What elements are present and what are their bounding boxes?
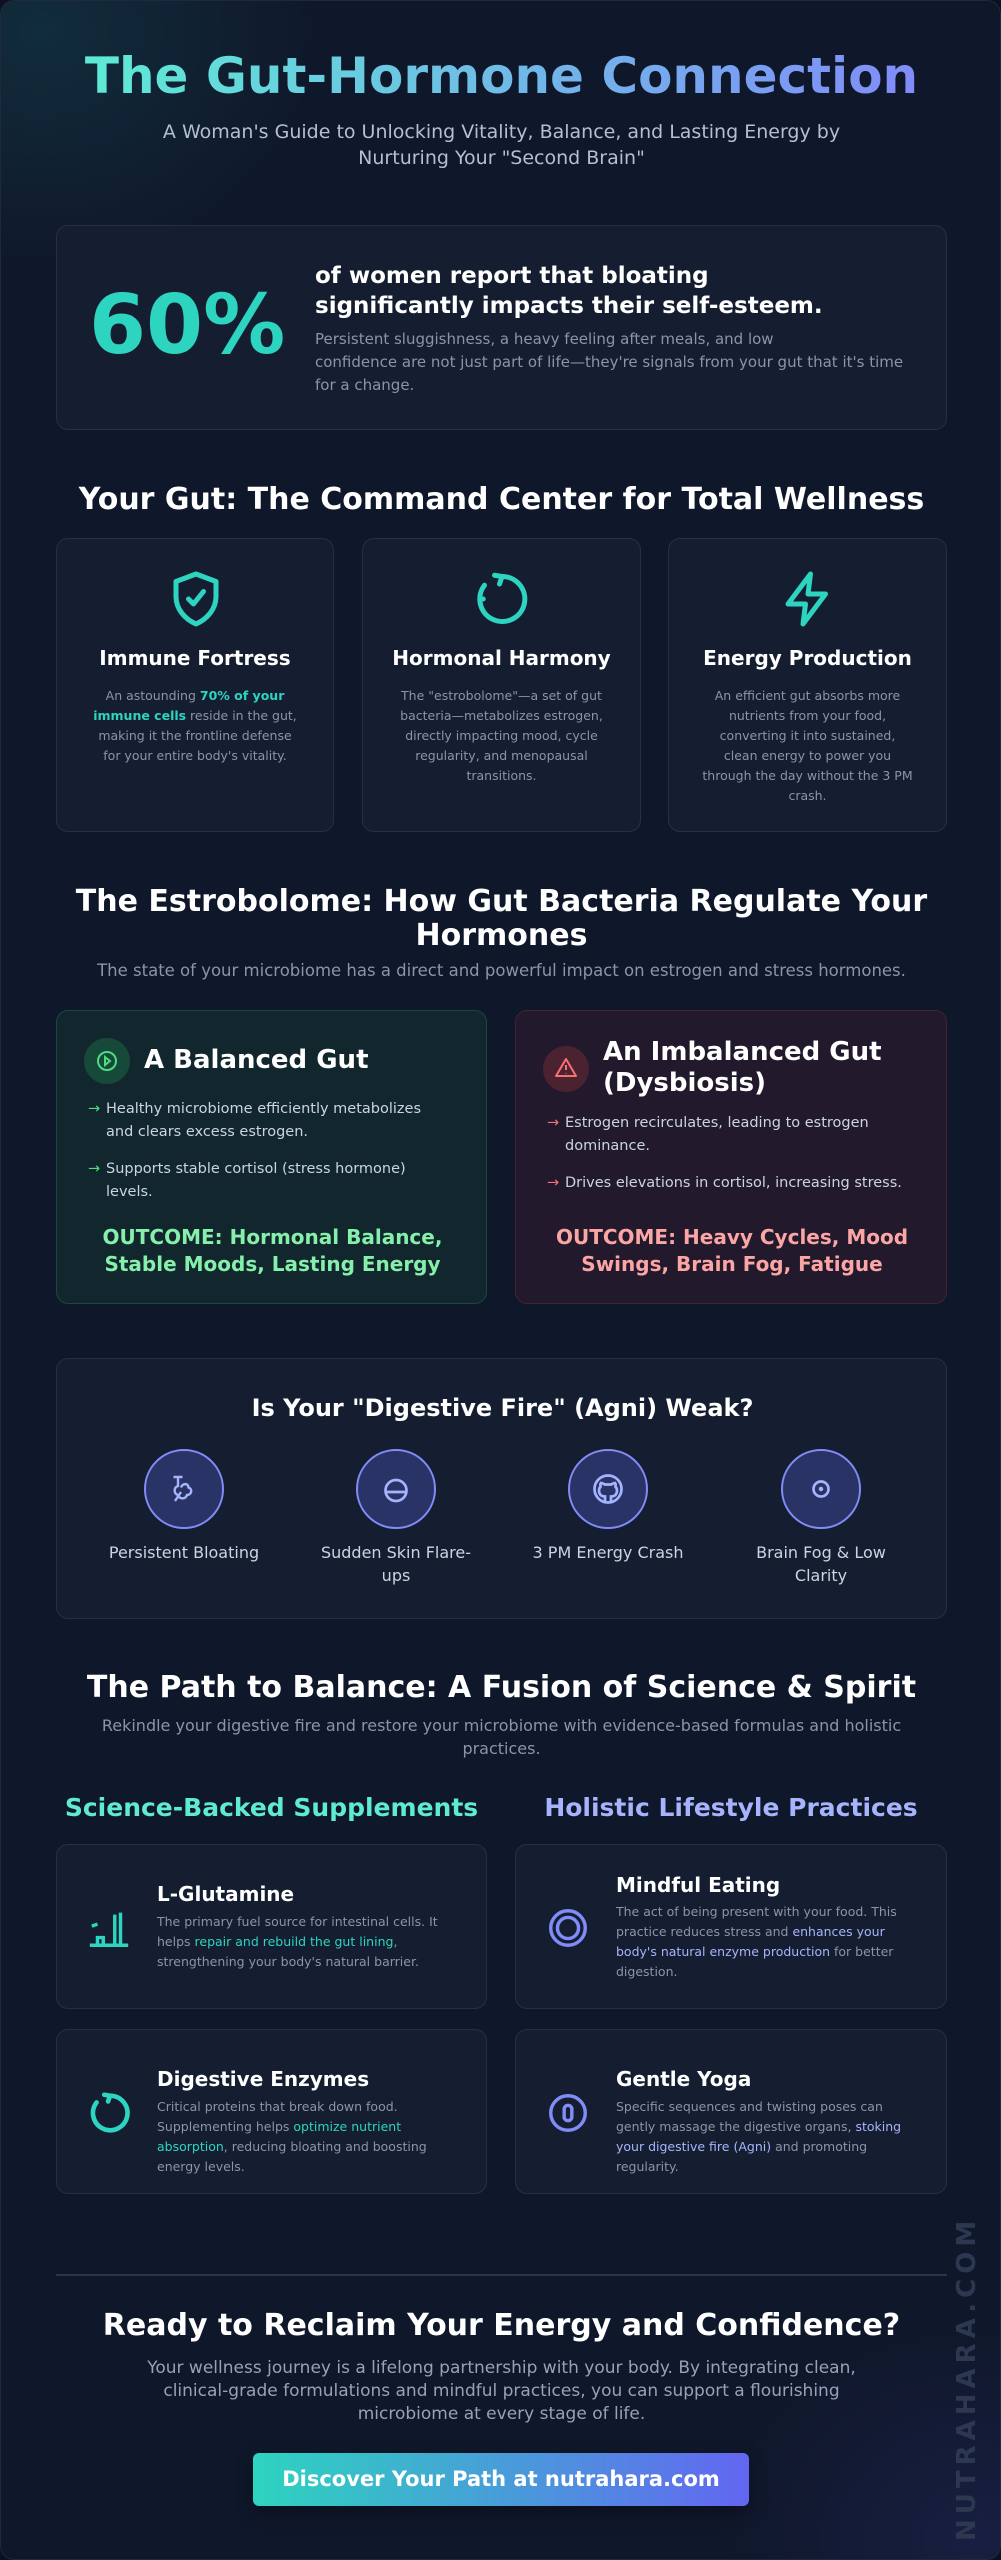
symptom: bloating: Persistent Bloating	[109, 1543, 259, 1562]
cta heading: Ready to Reclaim Your Energy and Confidence?	[103, 2308, 900, 2343]
column heading: supplements: Science-Backed Supplements	[65, 1793, 478, 1822]
heading: Is Your "Digestive Fire" (Agni) Weak?	[252, 1394, 753, 1422]
icon: warning	[543, 1046, 589, 1092]
symptom: brain fog: Brain Fog & Low Clarity	[756, 1543, 886, 1585]
text: An astounding 70% of your immune cells reside in the gut, making it the frontline defense for your entire body's vitality.	[93, 688, 297, 763]
card: l-glutamine	[56, 1844, 487, 2009]
title: Gentle Yoga	[616, 2067, 751, 2091]
heading: A Balanced Gut	[144, 1045, 368, 1075]
text: The act of being present with your food. This practice reduces stress and enhances your body's natural enzyme production for better digestion.	[616, 1904, 897, 1979]
symptom: bloating	[109, 1449, 259, 1562]
text: An efficient gut absorbs more nutrients from your food, converting it into sustained, clean energy to power you through the day without the 3 PM crash.	[702, 688, 913, 803]
bullet: Supports stable cortisol (stress hormone) levels.	[106, 1161, 406, 1200]
cta button: Discover Your Path at nutrahara.com	[282, 2467, 720, 2491]
panel: imbalanced gut	[515, 1010, 947, 1304]
icon: shield	[174, 572, 218, 626]
icon: enzymes	[90, 2092, 130, 2133]
text: NUTRAHARA.COM	[952, 2216, 982, 2541]
heading: path to balance: The Path to Balance: A Fusion of Science & Spirit	[87, 1670, 916, 1705]
bullet: Drives elevations in cortisol, increasing stress.	[565, 1175, 902, 1191]
icon: play circle	[84, 1038, 130, 1084]
stat card	[56, 225, 947, 430]
title: Digestive Enzymes	[157, 2067, 369, 2091]
title: The Gut-Hormone Connection	[85, 47, 918, 105]
outcome: OUTCOME: Heavy Cycles, Mood Swings, Brain Fog, Fatigue	[556, 1225, 908, 1276]
stat body	[315, 330, 903, 394]
heading: Hormonal Harmony	[392, 646, 611, 670]
outcome: OUTCOME: Hormonal Balance, Stable Moods, Lasting Energy	[103, 1225, 442, 1276]
title: L-Glutamine	[157, 1882, 294, 1906]
heading: Immune Fortress	[99, 646, 291, 670]
panel: energy production	[668, 538, 947, 832]
panel: balanced gut	[56, 1010, 487, 1304]
panel: agni	[56, 1358, 947, 1619]
card: digestive enzymes	[56, 2029, 487, 2194]
panel: hormonal harmony	[362, 538, 641, 832]
stat number: 60%	[89, 278, 285, 373]
text: Specific sequences and twisting poses can gently massage the digestive organs, stoking your digestive fire (Agni) and promoting regularity.	[616, 2099, 901, 2174]
icon: cycle	[477, 572, 528, 624]
subtitle: A Woman's Guide to Unlocking Vitality, Balance, and Lasting Energy by Nurturing Your "Second Brain"	[163, 121, 840, 169]
panel: immune fortress	[56, 538, 334, 832]
card: gentle yoga	[515, 2029, 947, 2194]
heading: command center: Your Gut: The Command Center for Total Wellness	[79, 482, 924, 517]
icon: lightning	[786, 572, 828, 626]
estrobolome subtitle: The state of your microbiome has a direct and powerful impact on estrogen and stress hormones.	[97, 961, 906, 980]
bullet: Estrogen recirculates, leading to estrogen dominance.	[565, 1115, 869, 1154]
cta text: Your wellness journey is a lifelong partnership with your body. By integrating clean, clinical-grade formulations and mindful practices, you can support a flourishing microbiome at every stage of life.	[147, 2358, 856, 2424]
path subtitle: Rekindle your digestive fire and restore your microbiome with evidence-based formulas and holistic practices.	[102, 1716, 901, 1758]
stat body: Persistent sluggishness, a heavy feeling after meals, and low	[315, 330, 774, 348]
panel: balanced gut: →	[88, 1101, 100, 1117]
stat headline: of women report that bloating significantly impacts their self-esteem.	[315, 263, 823, 319]
symptom: brain fog	[756, 1449, 886, 1585]
card: mindful eating	[515, 1844, 947, 2009]
heading: estrobolome: The Estrobolome: How Gut Bacteria Regulate Your Hormones	[76, 884, 927, 953]
icon: yoga	[549, 2094, 587, 2132]
panel: imbalanced gut: →	[547, 1115, 559, 1131]
column heading: lifestyle: Holistic Lifestyle Practices	[544, 1793, 918, 1822]
text: Critical proteins that break down food. Supplementing helps optimize nutrient absorption, reducing bloating and boosting energy levels.	[157, 2099, 427, 2174]
icon: chart	[90, 1912, 128, 1947]
cta button	[253, 2453, 749, 2506]
panel: imbalanced gut: →	[547, 1175, 559, 1191]
stat body: confidence are not just part of life—they're signals from your gut that it's time for a change.	[315, 353, 903, 394]
bullet: Healthy microbiome efficiently metabolizes and clears excess estrogen.	[106, 1101, 421, 1140]
text: The primary fuel source for intestinal cells. It helps repair and rebuild the gut lining, strengthening your body's natural barrier.	[157, 1914, 438, 1969]
symptom: energy crash	[533, 1449, 683, 1562]
symptom: energy crash: 3 PM Energy Crash	[533, 1543, 683, 1562]
title: Mindful Eating	[616, 1873, 780, 1897]
symptom: skin	[321, 1449, 471, 1585]
icon: rings	[549, 1909, 587, 1947]
heading: Energy Production	[703, 646, 912, 670]
symptom: skin: Sudden Skin Flare-ups	[321, 1543, 471, 1585]
text: The "estrobolome"—a set of gut bacteria—metabolizes estrogen, directly impacting mood, cycle regularity, and menopausal transitions.	[400, 688, 603, 783]
heading: An Imbalanced Gut (Dysbiosis)	[603, 1037, 882, 1098]
panel: balanced gut: →	[88, 1161, 100, 1177]
